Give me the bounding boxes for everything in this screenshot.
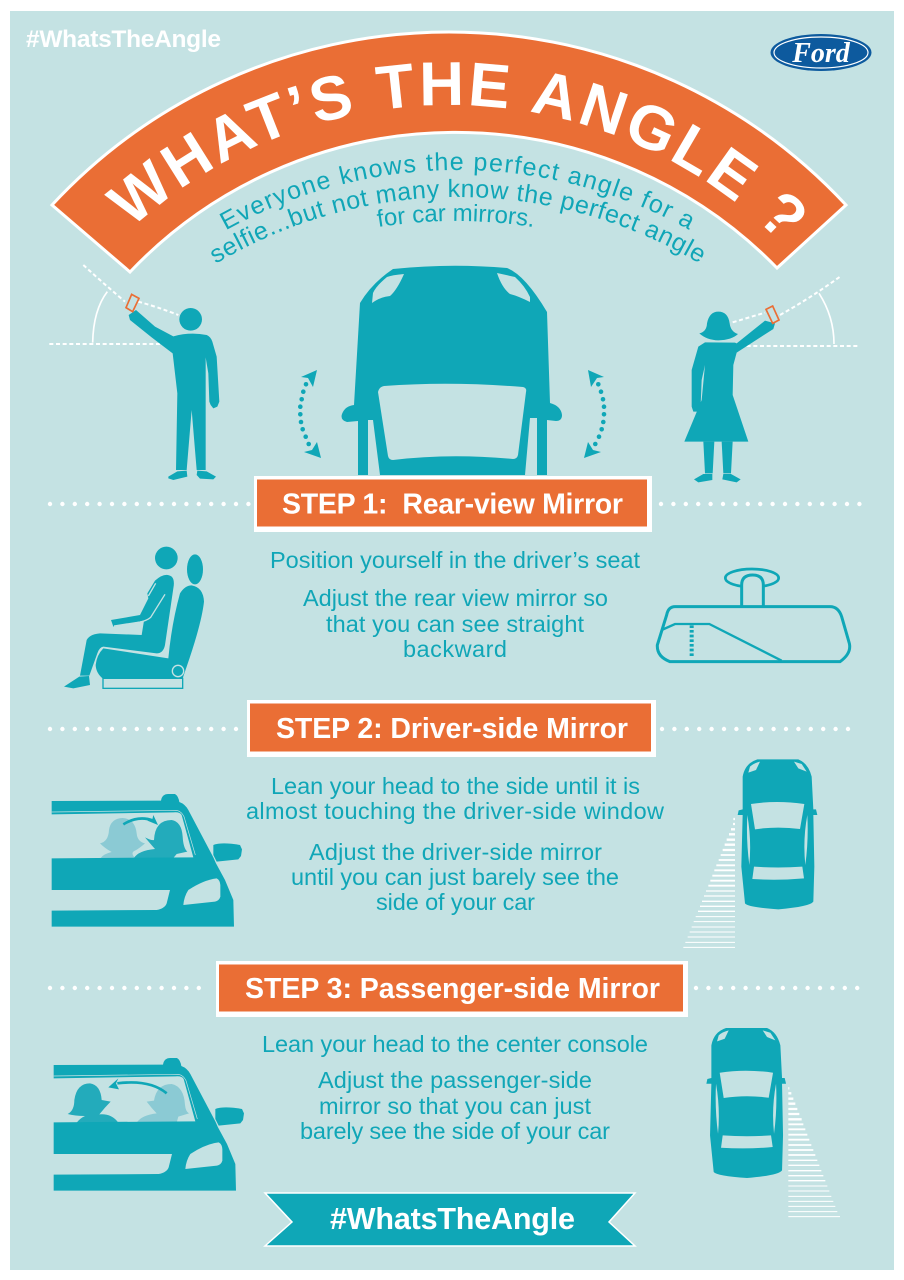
step 1 heading	[50, 476, 860, 532]
icon: car top view with left blind-spot lines	[683, 759, 817, 947]
woman taking selfie	[684, 277, 860, 482]
icon: rear-view mirror	[657, 569, 850, 662]
icon: Ford logo: Ford	[791, 38, 851, 69]
step 3 text: barely see the side of your car	[300, 1118, 610, 1144]
man taking selfie	[49, 265, 219, 480]
step 1 text: Adjust the rear view mirror so	[303, 585, 608, 611]
subtitle: Everyone knows the perfect angle for a	[220, 152, 692, 230]
icon: car side view, passenger-side lean	[54, 1058, 244, 1191]
step 3 text: Lean your head to the center console	[262, 1031, 648, 1057]
title text: WHAT’S THE ANGLE ?	[104, 62, 804, 233]
step 3 text	[262, 1031, 648, 1144]
step 2 text	[246, 773, 665, 915]
step 3 heading: STEP 3: Passenger-side Mirror	[245, 973, 660, 1005]
step 3 text: Adjust the passenger-side	[318, 1067, 592, 1093]
icon: car side view, driver-side lean	[52, 794, 242, 927]
step 2 text: Adjust the driver-side mirror	[309, 839, 602, 865]
step 1 heading: STEP 1: Rear-view Mirror	[282, 488, 623, 520]
arrow: right rotation dots	[584, 370, 606, 458]
step 3 text: mirror so that you can just	[319, 1093, 591, 1119]
step 2 text: until you can just barely see the	[291, 864, 619, 890]
step 2 heading: STEP 2: Driver-side Mirror	[276, 713, 628, 745]
step 3 heading	[50, 961, 860, 1017]
step 2 heading	[50, 700, 860, 757]
footer ribbon	[265, 1193, 635, 1246]
step 2 text: Lean your head to the side until it is	[271, 773, 640, 799]
step 1 text: that you can see straight	[326, 611, 584, 637]
step 1 text: backward	[403, 636, 507, 662]
step 2 text: side of your car	[376, 889, 535, 915]
subtitle: selfie...but not many know the perfect angle	[211, 178, 704, 262]
car front view	[342, 266, 562, 475]
arrow: left rotation dots	[298, 370, 321, 458]
icon: car top view with right blind-spot lines	[706, 1028, 840, 1217]
step 1 text	[270, 547, 640, 662]
icon: Ford logo	[770, 34, 872, 71]
hashtag top left: #WhatsTheAngle	[26, 26, 221, 53]
title banner	[50, 30, 848, 274]
footer ribbon: #WhatsTheAngle	[330, 1202, 575, 1236]
step 1 text: Position yourself in the driver’s seat	[270, 547, 640, 573]
icon: person in seat	[64, 547, 204, 688]
step 2 text: almost touching the driver-side window	[246, 798, 665, 824]
subtitle: for car mirrors.	[376, 204, 532, 227]
